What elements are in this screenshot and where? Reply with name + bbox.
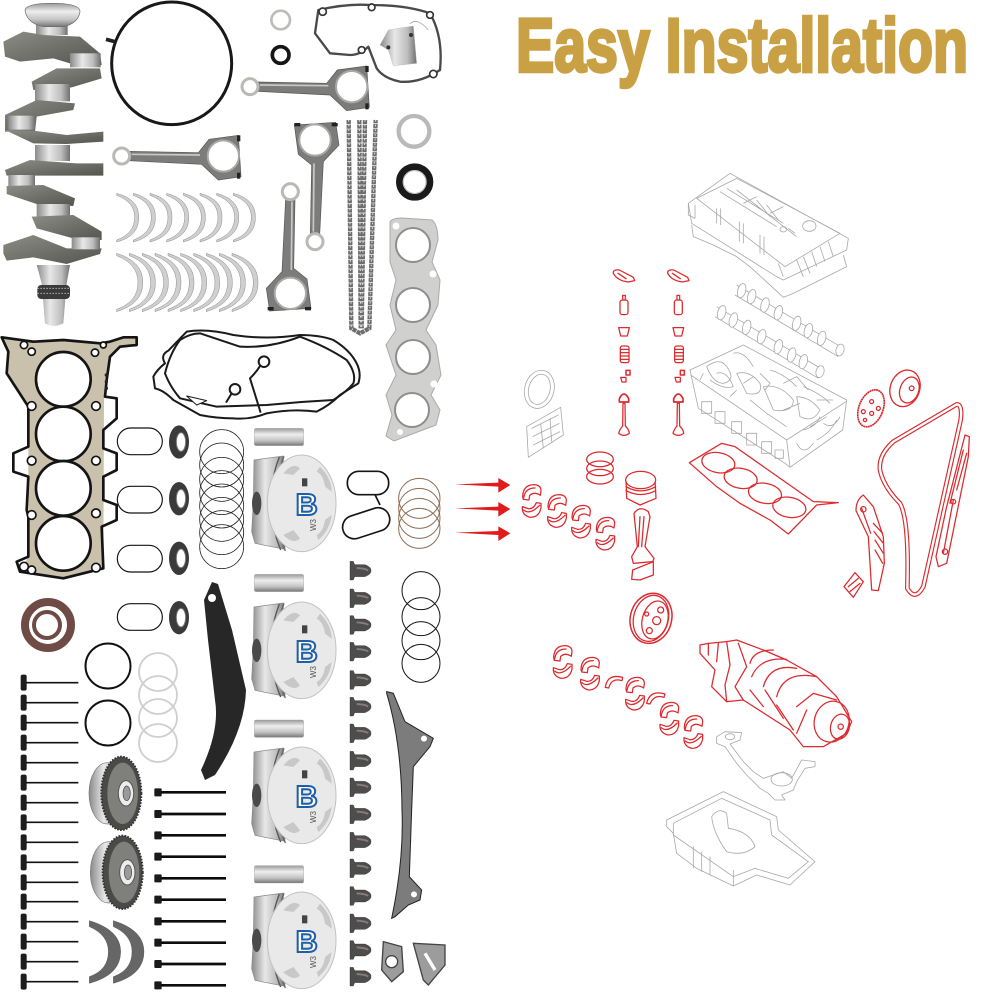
crankshaft [3,3,103,326]
small gaskets [382,942,445,985]
piston 3: W3 [309,810,318,823]
rear seal and plate [520,367,563,457]
arrows [455,478,510,541]
crankshaft outline [700,640,854,747]
piston 4: B [296,925,318,959]
cam phaser gears [89,757,143,909]
black o-rings [86,644,130,746]
bearing shells upper row [117,193,255,242]
tensioner [380,21,428,66]
gold rings [399,478,440,548]
piston 1 [252,455,336,552]
dual lobe gasket [340,471,393,542]
crank pulley [624,589,678,648]
panel: parts kit [2,2,445,990]
panel: engine exploded diagram [455,173,969,597]
oval gaskets, oil seals, piston rings [117,425,440,883]
long valves [21,675,78,990]
piston rings [587,452,613,484]
cylinder head gasket [2,337,137,578]
small rings [271,11,290,63]
piston 4 [252,892,336,989]
large o-ring [106,2,232,125]
black chain guide [201,582,246,780]
silver ring [399,116,429,147]
sprockets [853,366,925,431]
panel: lower engine diagram [553,589,854,886]
bearing shells lower row [117,253,258,312]
rear crank seal [25,602,71,648]
piston 2: B [296,635,318,669]
connecting rod [632,509,654,580]
oil seal [399,167,430,197]
wrist pins [254,428,304,883]
main bearings [553,646,703,748]
piston 3 [252,747,336,844]
timing chain [349,120,376,333]
oil pan [667,792,815,886]
flange bolts column [350,561,371,986]
piston ring stack [200,430,244,569]
piston 2: W3 [309,665,318,678]
left chain guide [856,495,884,591]
light rings [139,653,177,762]
valve cover [688,173,848,297]
head gasket outline [689,443,838,534]
exhaust manifold gasket [386,218,441,441]
oil pickup [717,732,815,800]
bottom fasteners and gears [21,675,445,990]
piston 2 [252,602,336,699]
black rings [402,572,440,682]
camshafts [715,283,845,378]
top gaskets and seals [106,2,441,333]
piston 4: W3 [309,955,318,968]
piston [626,471,656,505]
valve cover gasket [153,331,360,419]
timing chain guide [387,692,433,918]
head bolts [154,788,226,989]
connecting rods [114,66,369,311]
piston 3: B [296,780,318,814]
rod bearings [522,485,615,550]
timing chain outline [880,404,961,595]
water pump gasket [315,4,441,82]
oil seals [169,425,189,634]
valve train right [668,270,689,435]
cylinder head [690,345,847,467]
chain tensioner [844,573,863,597]
valve train left [613,270,635,435]
oval gaskets [117,428,162,630]
right chain guide [936,435,969,567]
piston 1: B [296,488,318,522]
piston 1: W3 [309,518,318,531]
thrust bearings [89,921,144,983]
